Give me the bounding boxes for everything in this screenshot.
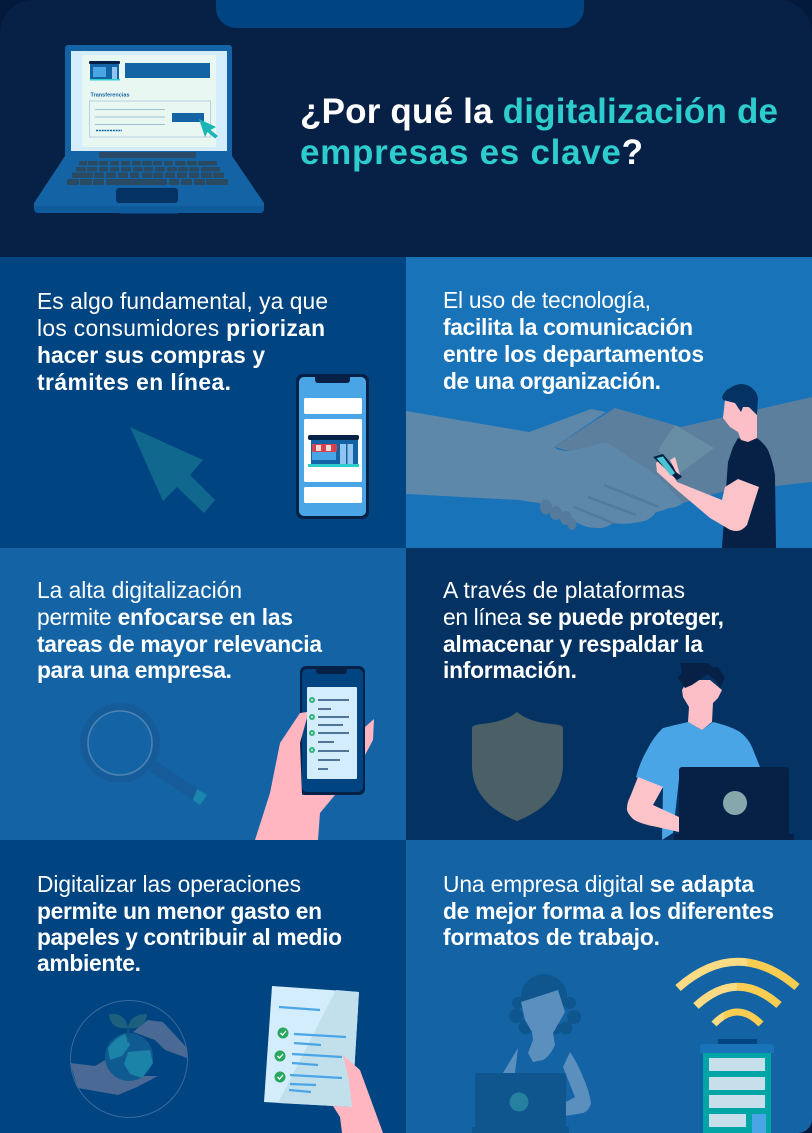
text: adaptation <box>443 871 774 950</box>
text: communication: facilita la comunicación <box>443 314 693 340</box>
hair <box>722 384 758 415</box>
text: focus: para una empresa. <box>37 657 232 683</box>
text: consumers: Es algo fundamental, ya que <box>37 288 328 314</box>
icon: wifi <box>678 962 797 1024</box>
laptop <box>679 767 789 834</box>
panel: paper savings <box>0 840 406 1133</box>
text: communication: de una organización. <box>443 368 661 394</box>
text: communication <box>443 287 704 394</box>
text: focus: La alta digitalización <box>37 577 242 603</box>
text: focus <box>37 577 322 683</box>
text: consumers: trámites en línea. <box>37 369 231 395</box>
icon: building <box>700 1039 774 1133</box>
text: adaptation: de mejor forma a los diferentes <box>443 898 774 924</box>
icon: cursor <box>130 427 215 513</box>
top tab <box>216 0 584 28</box>
icon: document in hand <box>264 986 383 1133</box>
face and neck <box>723 400 757 442</box>
text: adaptation: formatos de trabajo. <box>443 924 660 950</box>
text: paper savings: ambiente. <box>37 950 141 976</box>
panel: focus <box>0 548 406 840</box>
icon: hand holding phone <box>255 666 374 840</box>
text: protection <box>443 577 724 683</box>
arm <box>656 458 759 531</box>
text: paper savings: permite un menor gasto en <box>37 898 322 924</box>
text: focus: tareas de mayor relevancia <box>37 631 322 657</box>
title: ¿Por qué la digitalización de <box>300 92 778 131</box>
icon: woman with laptop <box>472 974 591 1133</box>
text: protection: información. <box>443 657 577 683</box>
icon: shop <box>308 435 359 467</box>
text: adaptation: Una empresa digital se adapta <box>443 871 754 897</box>
text: protection: en línea se puede proteger, <box>443 604 724 630</box>
icon: signal dots <box>658 425 714 473</box>
icon: laptop: Transferencias <box>90 92 130 98</box>
icon: laptop <box>34 45 264 214</box>
title <box>300 92 778 172</box>
title: empresas es clave? <box>300 133 643 172</box>
icon: phone with shop <box>296 374 369 519</box>
panel: adaptation <box>406 840 812 1133</box>
panel: communication <box>406 257 812 548</box>
shirt <box>722 438 776 548</box>
panel: consumers <box>0 257 406 548</box>
face and neck <box>682 680 722 730</box>
icon: globe in hands <box>70 1000 188 1118</box>
shirt <box>636 722 760 840</box>
text: consumers: hacer sus compras y <box>37 342 265 368</box>
text: protection: A través de plataformas <box>443 577 685 603</box>
hair <box>509 974 581 1034</box>
icon: magnifier <box>84 707 207 805</box>
text: paper savings: Digitalizar las operaciones <box>37 871 301 897</box>
text: paper savings: papeles y contribuir al medio <box>37 924 342 950</box>
hair <box>678 663 725 688</box>
icon: cursor <box>199 119 218 138</box>
arm <box>627 777 679 832</box>
text: protection: almacenar y respaldar la <box>443 631 703 657</box>
text: consumers <box>37 288 328 395</box>
icon: person with laptop <box>627 663 794 840</box>
text: focus: permite enfocarse en las <box>37 604 293 630</box>
checklist <box>309 697 349 769</box>
panel: protection <box>406 548 812 840</box>
keyboard <box>67 161 228 185</box>
icon: shield <box>472 712 563 821</box>
text: paper savings <box>37 871 342 976</box>
phone <box>653 454 682 480</box>
icon: man with phone <box>653 384 776 548</box>
panel: header <box>0 0 812 300</box>
text: consumers: los consumidores priorizan <box>37 315 325 341</box>
text: communication: El uso de tecnología, <box>443 287 651 313</box>
icon: handshake <box>406 397 812 530</box>
text: communication: entre los departamentos <box>443 341 704 367</box>
